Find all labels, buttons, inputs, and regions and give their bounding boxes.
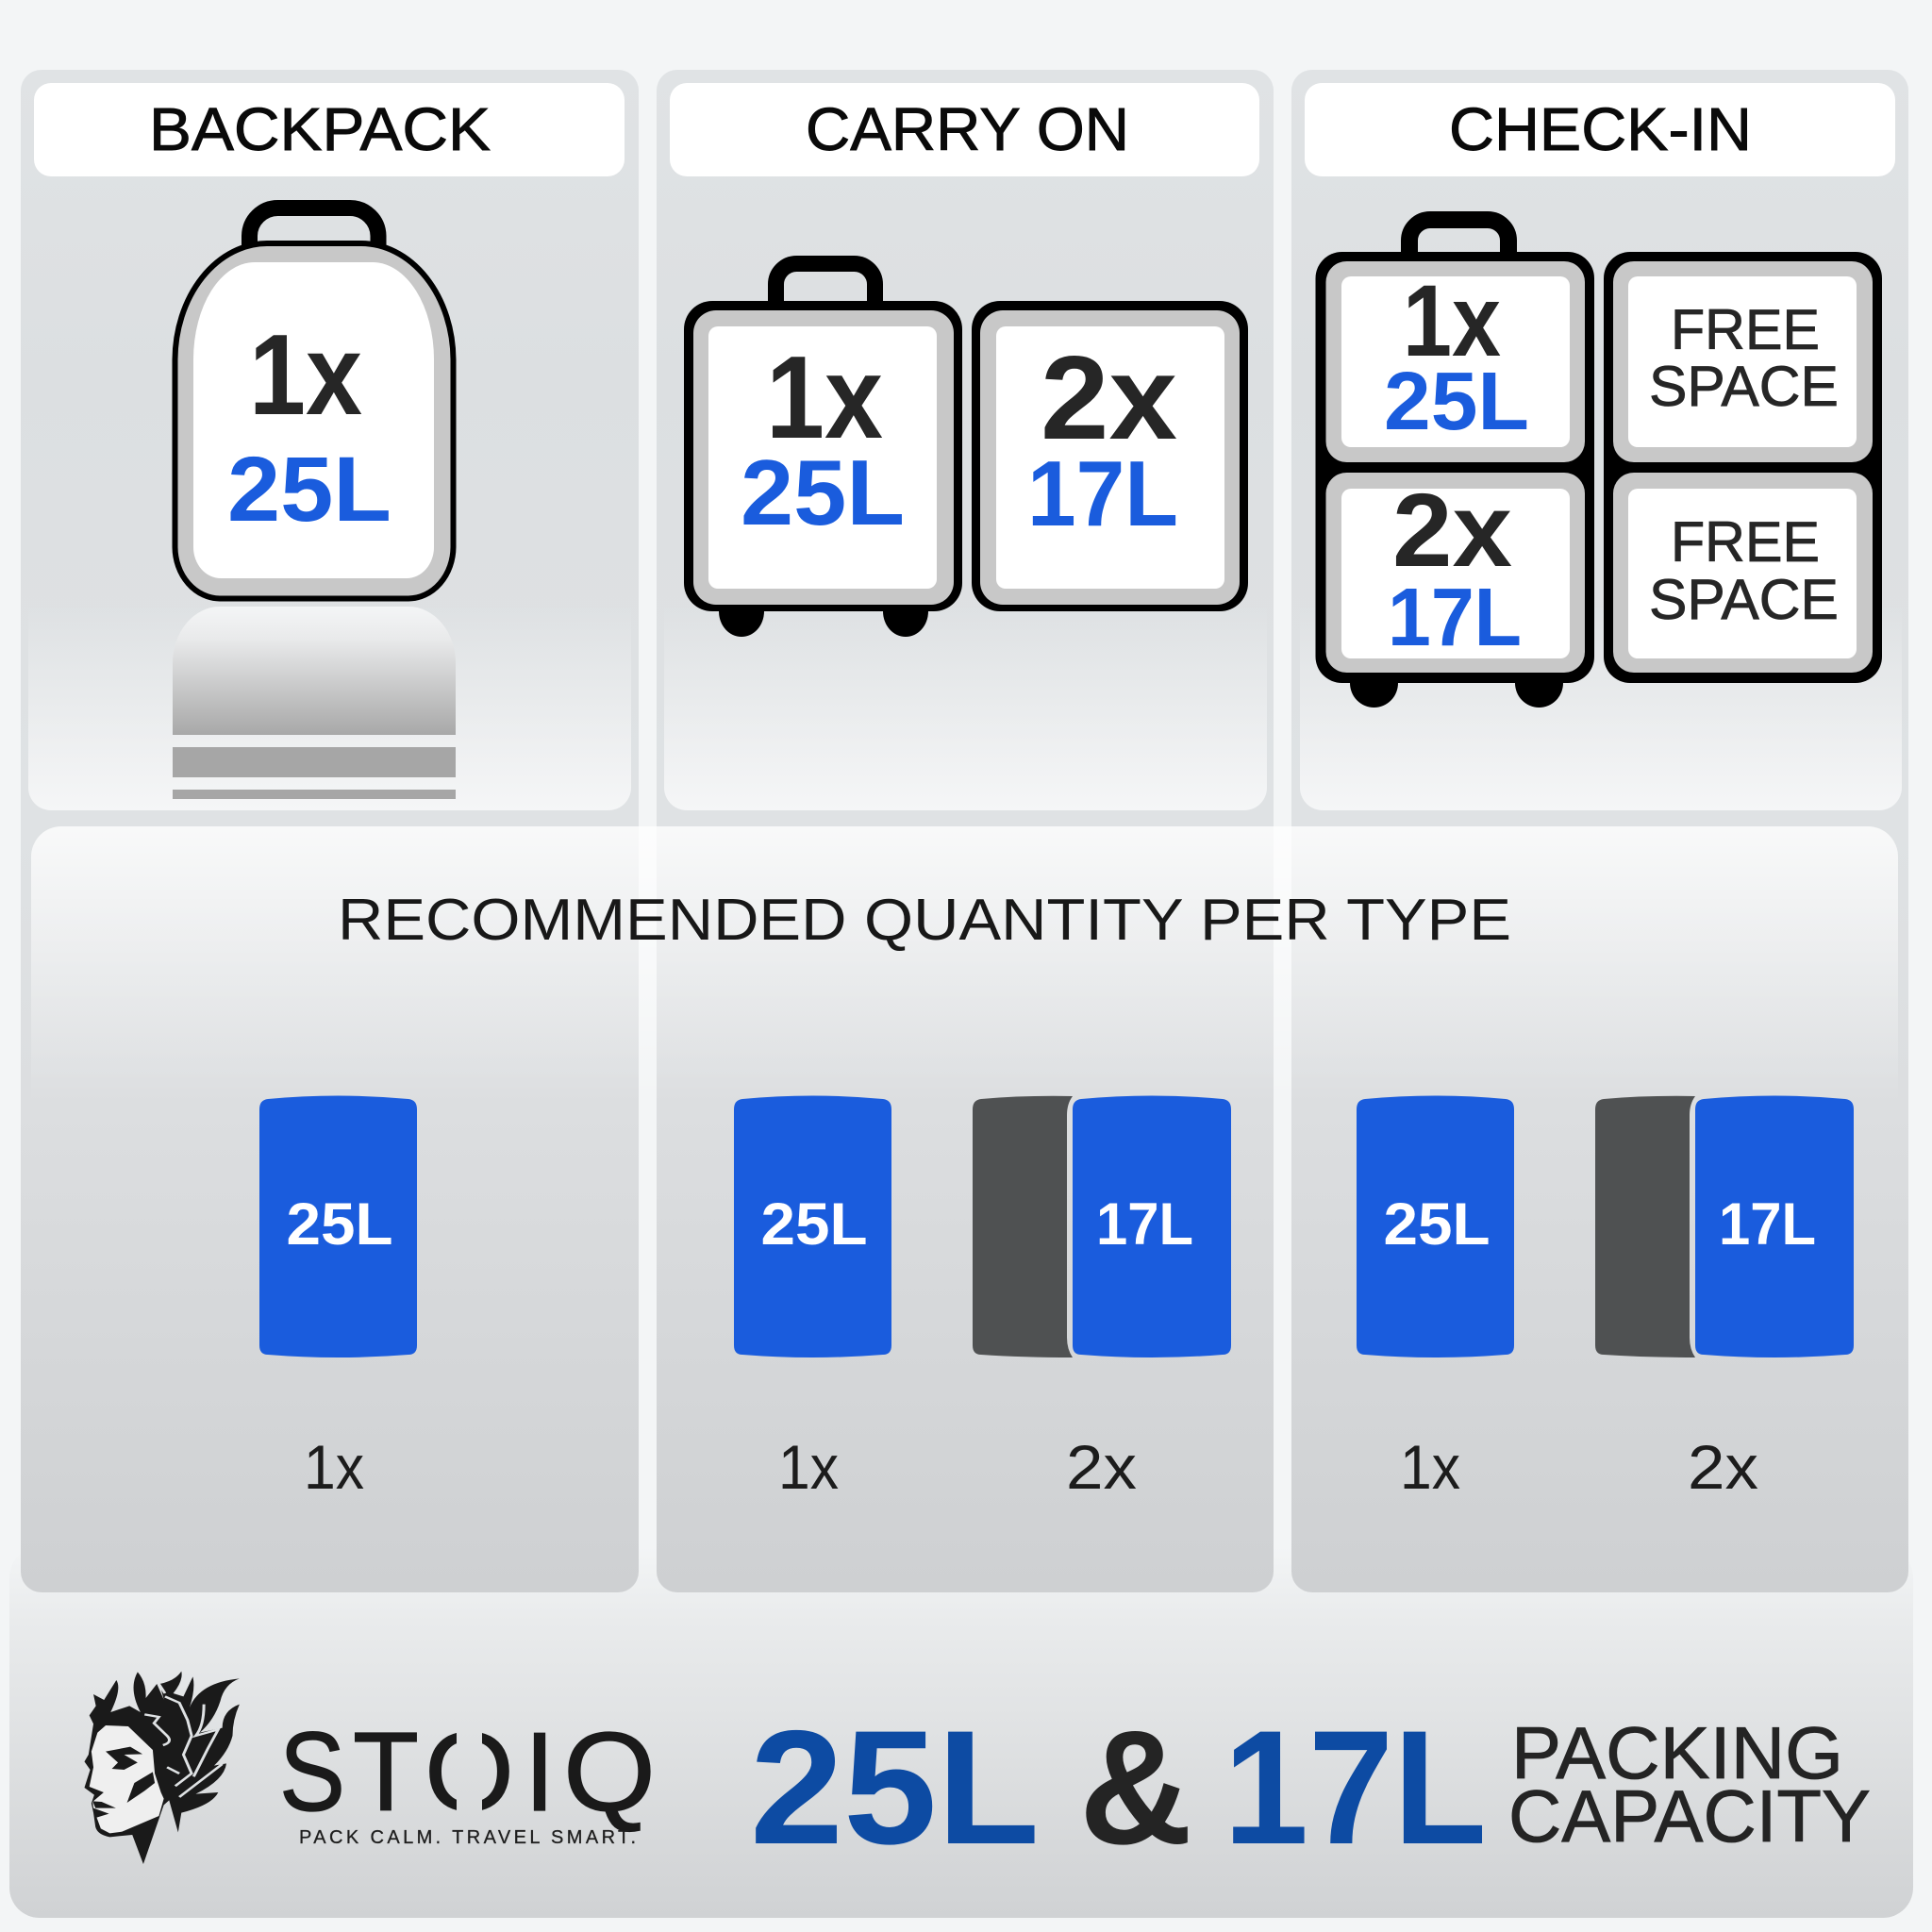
icon: carry-on suitcase with 1x 25L — [684, 264, 962, 637]
icon: check-in suitcase right side with free space: FREE — [1671, 510, 1820, 574]
check-in 17L packing cubes stacked: 17L — [1719, 1191, 1816, 1257]
carry on quantity labels: 2x — [1066, 1432, 1137, 1502]
heading: backpack — [34, 83, 625, 176]
heading: check-in — [1305, 83, 1895, 176]
heading: backpack: BACKPACK — [149, 95, 491, 163]
panel: check-in — [1300, 83, 1902, 810]
icon: backpack with 1x 25L — [175, 208, 453, 598]
icon: carry-on suitcase with 1x 25L: 25L — [741, 441, 905, 544]
main title: 25L & 17L packing capacity: PACKING — [1511, 1711, 1843, 1794]
carry on quantity labels — [778, 1432, 1137, 1502]
icon: check-in suitcase left side: 17L — [1388, 572, 1522, 663]
icon: stoiq logo head — [84, 1672, 240, 1864]
icon: check-in suitcase right side with free space — [1604, 252, 1882, 683]
main title: 25L & 17L packing capacity: 25L — [750, 1697, 1040, 1878]
main title: 25L & 17L packing capacity: 17L — [1224, 1697, 1487, 1878]
icon: carry-on compartment with 2x 17L: 2x — [1041, 331, 1177, 464]
check-in quantity labels: 2x — [1688, 1432, 1758, 1502]
brand wordmark — [283, 1731, 651, 1832]
icon: check-in suitcase right side with free space: SPACE — [1649, 355, 1839, 418]
column panels — [21, 70, 1908, 1592]
icon: carry-on suitcase with 1x 25L: 1x — [766, 333, 883, 463]
icon: backpack with 1x 25L: 25L — [227, 438, 391, 541]
carry on quantity labels: 1x — [778, 1432, 839, 1502]
carry on 17L packing cubes stacked: 17L — [1096, 1191, 1193, 1257]
carry on 25L packing cube — [734, 1096, 891, 1357]
icon: check-in suitcase left side — [1315, 220, 1594, 708]
carry on 25L packing cube: 25L — [760, 1191, 868, 1257]
icon: check-in suitcase left side: 2x — [1392, 473, 1512, 589]
icon: backpack with 1x 25L: 1x — [249, 310, 362, 439]
check-in 25L packing cube: 25L — [1383, 1191, 1491, 1257]
brand wordmark: Q — [563, 1709, 656, 1835]
check-in 17L packing cubes stacked — [1595, 1096, 1854, 1357]
heading: recommended quantity: RECOMMENDED QUANTITY PER TYPE — [338, 888, 1511, 953]
panel: backpack — [28, 83, 631, 810]
brand wordmark: I — [525, 1709, 556, 1835]
icon: carry-on compartment with 2x 17L: 17L — [1027, 441, 1178, 545]
backpack 25L packing cube: 25L — [287, 1191, 392, 1257]
main title: 25L & 17L packing capacity: & — [1079, 1697, 1192, 1878]
check-in 25L packing cube — [1357, 1096, 1514, 1357]
icon: check-in suitcase left side: 1x — [1403, 263, 1501, 377]
main title: 25L & 17L packing capacity: CAPACITY — [1508, 1774, 1871, 1857]
brand wordmark: O — [425, 1709, 514, 1835]
icon: backpack reflection — [173, 607, 456, 799]
icon: carry-on compartment with 2x 17L — [972, 301, 1248, 611]
icon: check-in suitcase right side with free space: SPACE — [1649, 568, 1839, 631]
panel: recommended quantity per type — [31, 826, 1898, 1204]
icon: check-in suitcase left side: 25L — [1384, 356, 1529, 447]
heading: carry on — [670, 83, 1259, 176]
footer background panel — [9, 1547, 1913, 1918]
backpack 25L packing cube — [259, 1096, 417, 1357]
icon: check-in suitcase right side with free space: FREE — [1671, 298, 1820, 361]
check-in quantity labels: 1x — [1400, 1432, 1460, 1502]
backpack quantity label: 1x — [304, 1432, 364, 1502]
brand wordmark: T — [353, 1709, 419, 1835]
brand tagline: PACK CALM. TRAVEL SMART. — [299, 1827, 636, 1848]
heading: check-in: CHECK-IN — [1449, 95, 1752, 163]
check-in quantity labels — [1400, 1432, 1758, 1502]
heading: carry on: CARRY ON — [806, 95, 1129, 163]
main title: 25L & 17L packing capacity — [750, 1697, 1871, 1878]
brand wordmark: S — [279, 1709, 345, 1835]
panel: carry on — [664, 83, 1267, 810]
carry on 17L packing cubes stacked — [973, 1096, 1231, 1357]
